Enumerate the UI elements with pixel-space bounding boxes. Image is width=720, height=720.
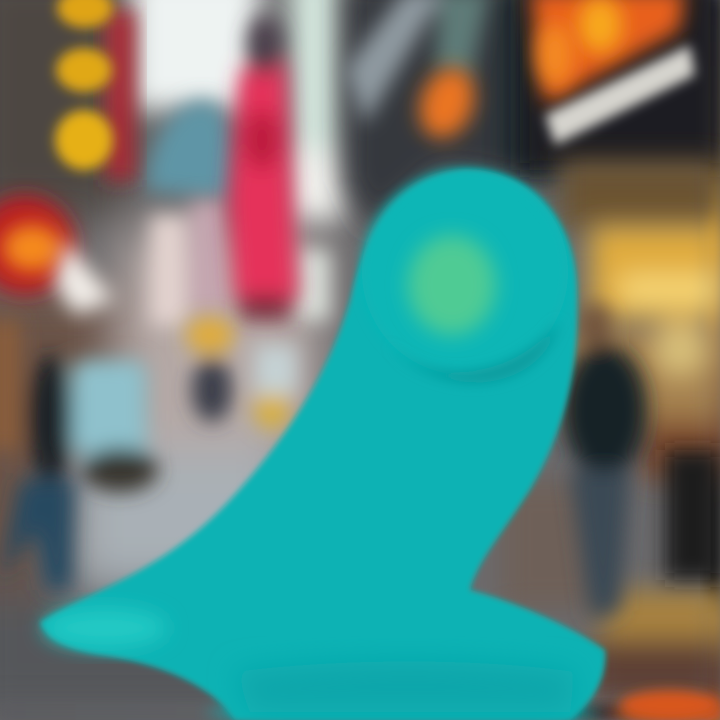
yellow lanterns [55,0,113,170]
pink-red tower [228,15,298,320]
sky [130,0,345,220]
dark building centre [345,0,560,230]
right edge colour strip [706,0,720,720]
circle lower shadow [385,320,560,383]
dark person at right [563,303,720,620]
orange neon sign top right [530,0,695,145]
distant blue mountain [145,100,235,200]
bottom edge colour strip [0,704,720,720]
teal curved shape [40,169,605,720]
lighter teal tail [43,608,167,648]
orange floor glow bottom right [620,690,720,720]
green centre [408,235,496,335]
orange blob sign [410,60,484,146]
teal circle [362,169,568,375]
left street background [0,0,320,720]
right shopfront [500,160,720,700]
red pillar behind lanterns [105,10,135,180]
golden lit shop [590,225,720,378]
distant pale buildings [150,200,330,325]
red-orange left sign [0,195,115,315]
right upper dark frame [520,0,720,170]
darker teal base [235,662,575,712]
grey diagonal stripes [345,0,490,125]
people and stalls at left [0,317,297,590]
